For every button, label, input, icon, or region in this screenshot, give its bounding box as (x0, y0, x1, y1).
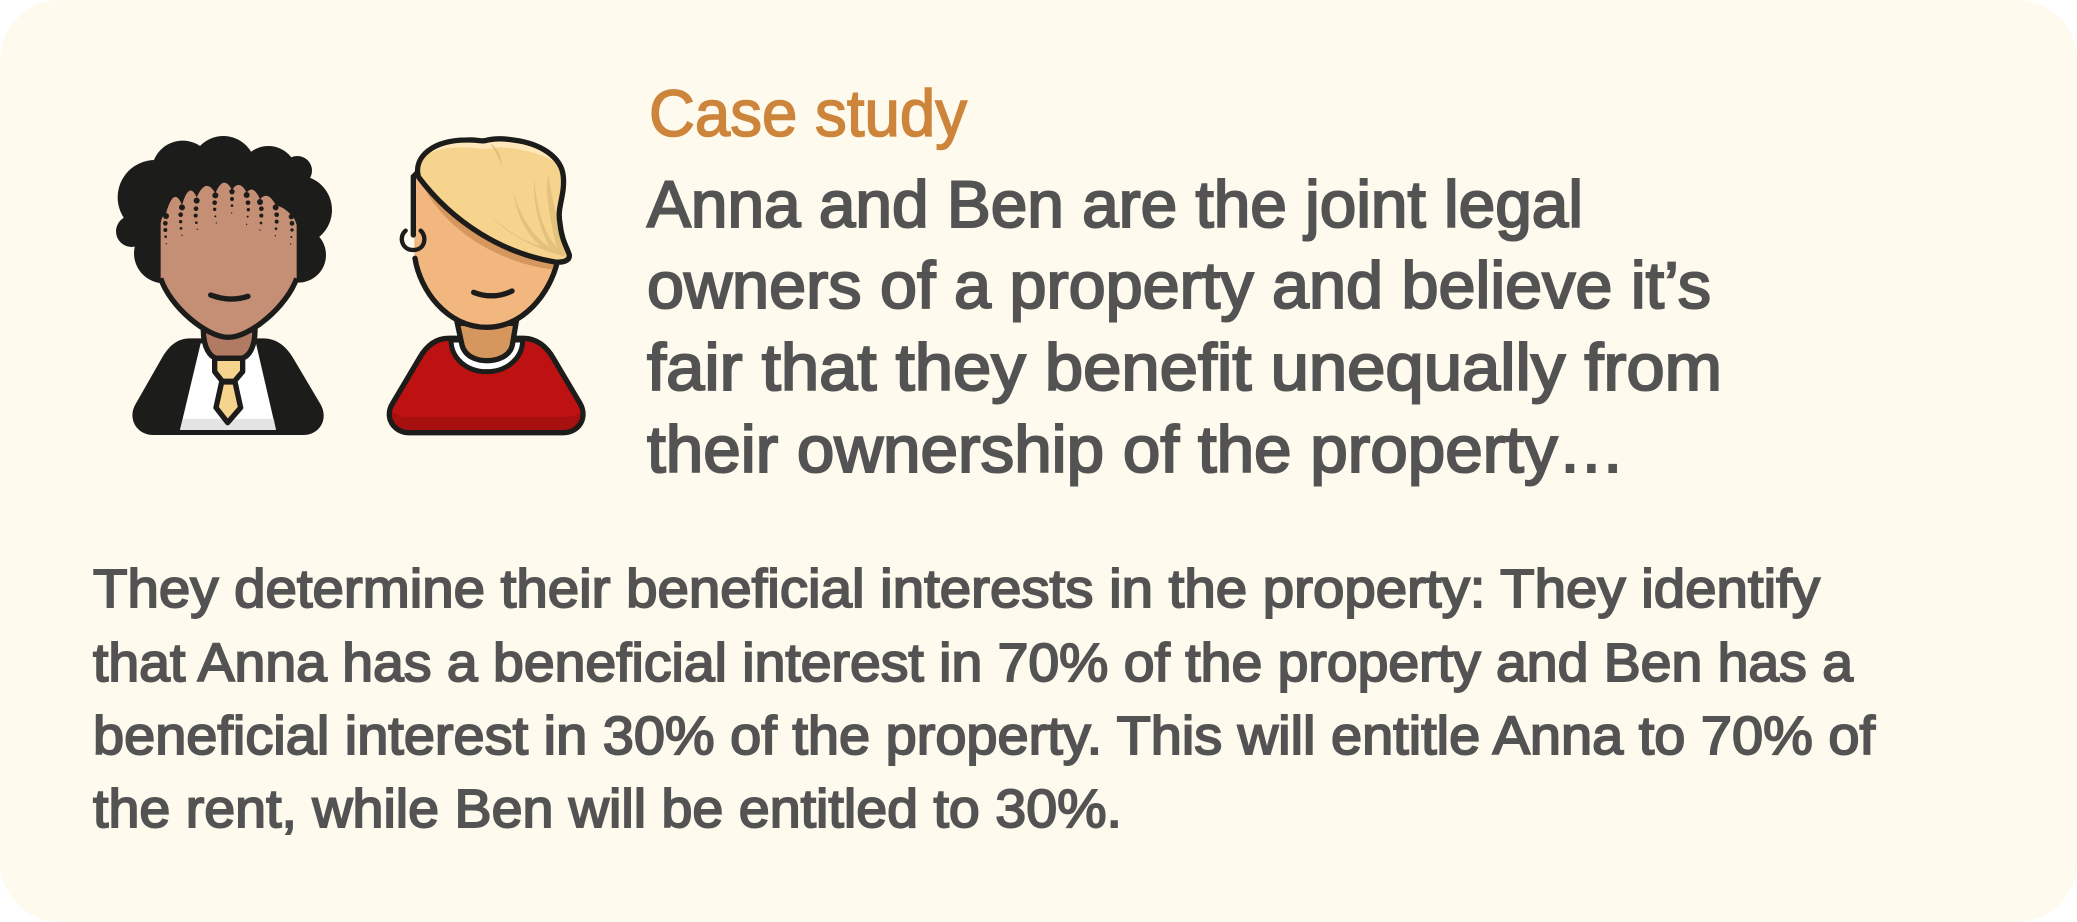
text block: beneficial interests explanation (93, 559, 1876, 839)
Anna shirt (180, 343, 276, 430)
Anna mouth (211, 295, 248, 299)
text block: introduction (647, 167, 1722, 486)
Anna fringe (163, 189, 294, 245)
Ben neck (457, 323, 516, 361)
Ben face (414, 173, 557, 327)
text block: introduction: Anna and Ben are the joint legal (647, 167, 1583, 241)
icon: Anna, woman in black suit (116, 136, 332, 435)
Anna hair (116, 136, 332, 283)
Anna jacket (132, 338, 324, 435)
Anna face (161, 183, 297, 337)
Ben mouth (474, 291, 512, 296)
text block: introduction: fair that they benefit unequally from (647, 330, 1722, 404)
Ben jumper (389, 338, 583, 433)
Ben hair shadow (418, 177, 555, 269)
text block: introduction: their ownership of the property… (647, 412, 1625, 486)
Ben earring (402, 231, 424, 250)
Anna neck (203, 330, 255, 358)
Ben hair (418, 139, 569, 262)
text block: beneficial interests explanation: that Anna has a beneficial interest in 70% of the property and Ben has a (93, 633, 1854, 693)
text block: introduction: owners of a property and believe it’s (647, 248, 1711, 322)
heading: case study: Case study (649, 76, 967, 150)
icon: Ben, man in red jumper (389, 139, 583, 433)
text block: beneficial interests explanation: the rent, while Ben will be entitled to 30%. (93, 779, 1122, 839)
Ben collar (451, 340, 523, 372)
Anna tie (215, 358, 243, 423)
text block: beneficial interests explanation: beneficial interest in 30% of the property. This will entitle Anna to 70% of (93, 706, 1876, 766)
text block: beneficial interests explanation: They determine their beneficial interests in the property: They identify (93, 559, 1820, 619)
